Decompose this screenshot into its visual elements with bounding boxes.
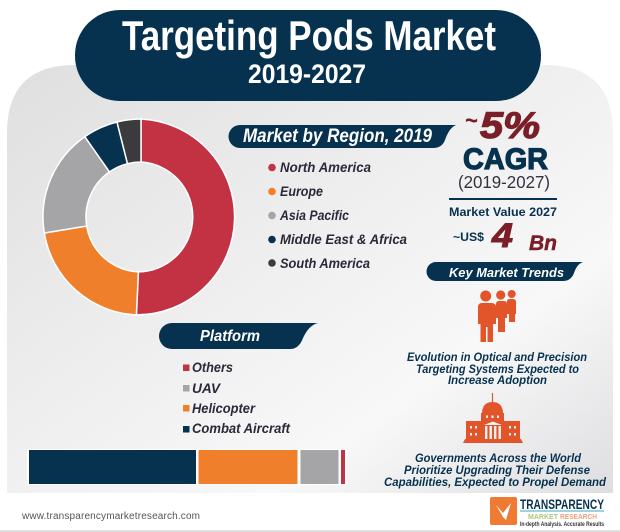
stat: CAGR: 5% [480, 105, 540, 146]
stat: CAGR: (2019-2027) [458, 172, 550, 192]
stat: CAGR [458, 105, 550, 192]
logo: transparency market research: MARKET [528, 512, 558, 521]
stat: CAGR: CAGR [463, 143, 548, 176]
stat: market value 2027: Market Value 2027 [449, 205, 557, 219]
logo: transparency market research: RESEARCH [560, 512, 597, 521]
platform legend: Combat Aircraft [192, 421, 290, 436]
platform legend: Others [192, 360, 233, 375]
text: optical targeting trend: Evolution in Optical and Precision [407, 350, 587, 364]
text: optical targeting trend: Increase Adoption [448, 373, 547, 387]
background panel [7, 65, 613, 493]
heading: key market trends [426, 262, 583, 281]
region legend: North America [280, 160, 371, 175]
region legend: Europe [280, 184, 323, 199]
stat: market value 2027: ~US$ [453, 230, 484, 244]
stat: CAGR: ~ [465, 105, 478, 135]
icon: group of people [478, 290, 516, 342]
text: government defense trend: Prioritize Upgrading Their Defense [404, 463, 590, 477]
platform legend [183, 360, 290, 436]
text: government defense trend [384, 451, 607, 489]
region legend [268, 160, 407, 271]
heading: key market trends: Key Market Trends [449, 265, 564, 280]
text: optical targeting trend: Targeting Systems Expected to [416, 362, 579, 376]
platform legend: UAV [192, 381, 221, 396]
text: government defense trend: Governments Across the World [415, 451, 582, 465]
stat: market value 2027: Bn [529, 232, 557, 255]
stat: market value 2027 [449, 205, 557, 255]
divider [449, 198, 557, 200]
heading: platform: Platform [200, 328, 260, 345]
region legend: South America [280, 256, 370, 271]
title banner [75, 10, 541, 101]
region legend: Asia Pacific [279, 208, 349, 223]
logo: transparency market research [490, 496, 605, 528]
title banner: Targeting Pods Market [122, 12, 496, 59]
stacked bar: platform share [27, 449, 347, 485]
stat: market value 2027: 4 [491, 217, 513, 255]
footer url: www.transparencymarketresearch.com [21, 511, 200, 522]
heading: market by region: Market by Region, 2019 [243, 126, 432, 147]
text: optical targeting trend [407, 350, 587, 387]
heading: platform [159, 323, 318, 349]
donut chart: market by region [43, 119, 235, 315]
region legend: Middle East & Africa [280, 232, 407, 247]
title banner: 2019-2027 [248, 59, 366, 89]
text: government defense trend: Capabilities, Expected to Propel Demand [384, 475, 607, 489]
logo: transparency market research: In-depth Analysis. Accurate Results [520, 522, 605, 528]
footer line [0, 530, 620, 532]
platform legend: Helicopter [192, 401, 256, 416]
icon: government building [463, 393, 523, 443]
